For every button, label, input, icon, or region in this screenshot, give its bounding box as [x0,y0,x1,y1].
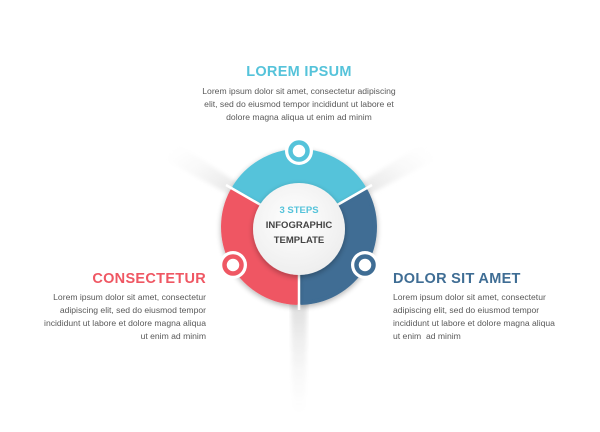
heading: right: DOLOR SIT AMET [393,271,521,287]
segment: top light blue [235,151,363,206]
center text: TEMPLATE [274,235,324,246]
icon: right ring [351,251,379,279]
text block: top: dolore magna aliqua ut enim ad minim [226,112,372,122]
text block: top: elit, sed do eiusmod tempor incididunt ut labore et [204,99,394,109]
text block: left [44,292,206,341]
segment: left red [223,191,298,303]
icon: left ring [219,251,247,279]
text block: top: Lorem ipsum dolor sit amet, consectetur adipiscing [202,86,396,96]
segment: right dark blue [300,191,375,303]
text block: right: adipiscing elit, sed do eiusmod tempor [393,305,539,315]
center circle [253,183,345,275]
text block: right [393,292,555,341]
heading: top: LOREM IPSUM [246,64,352,80]
white gaps between segments [226,185,372,310]
text block: right: ut enim ad minim [393,331,461,341]
shadow wedge: bottom [291,300,307,432]
text block: right: Lorem ipsum dolor sit amet, consectetur [393,292,546,302]
shadow wedge: upper-right [353,140,435,200]
text block: left: ut enim ad minim [141,331,206,341]
text block: left: incididunt ut labore et dolore magna aliqua [44,318,206,328]
center text: 3 STEPS [279,205,319,216]
center text: INFOGRAPHIC [266,220,332,231]
text block: right: incididunt ut labore et dolore magna aliqua [393,318,555,328]
shadow wedge: upper-left [165,140,245,200]
center text [266,205,332,246]
icon: top ring [285,137,313,165]
text block: top [202,86,396,122]
text block: left: Lorem ipsum dolor sit amet, consectetur [53,292,206,302]
heading: left: CONSECTETUR [92,271,206,287]
text block: left: adipiscing elit, sed do eiusmod tempor [60,305,206,315]
